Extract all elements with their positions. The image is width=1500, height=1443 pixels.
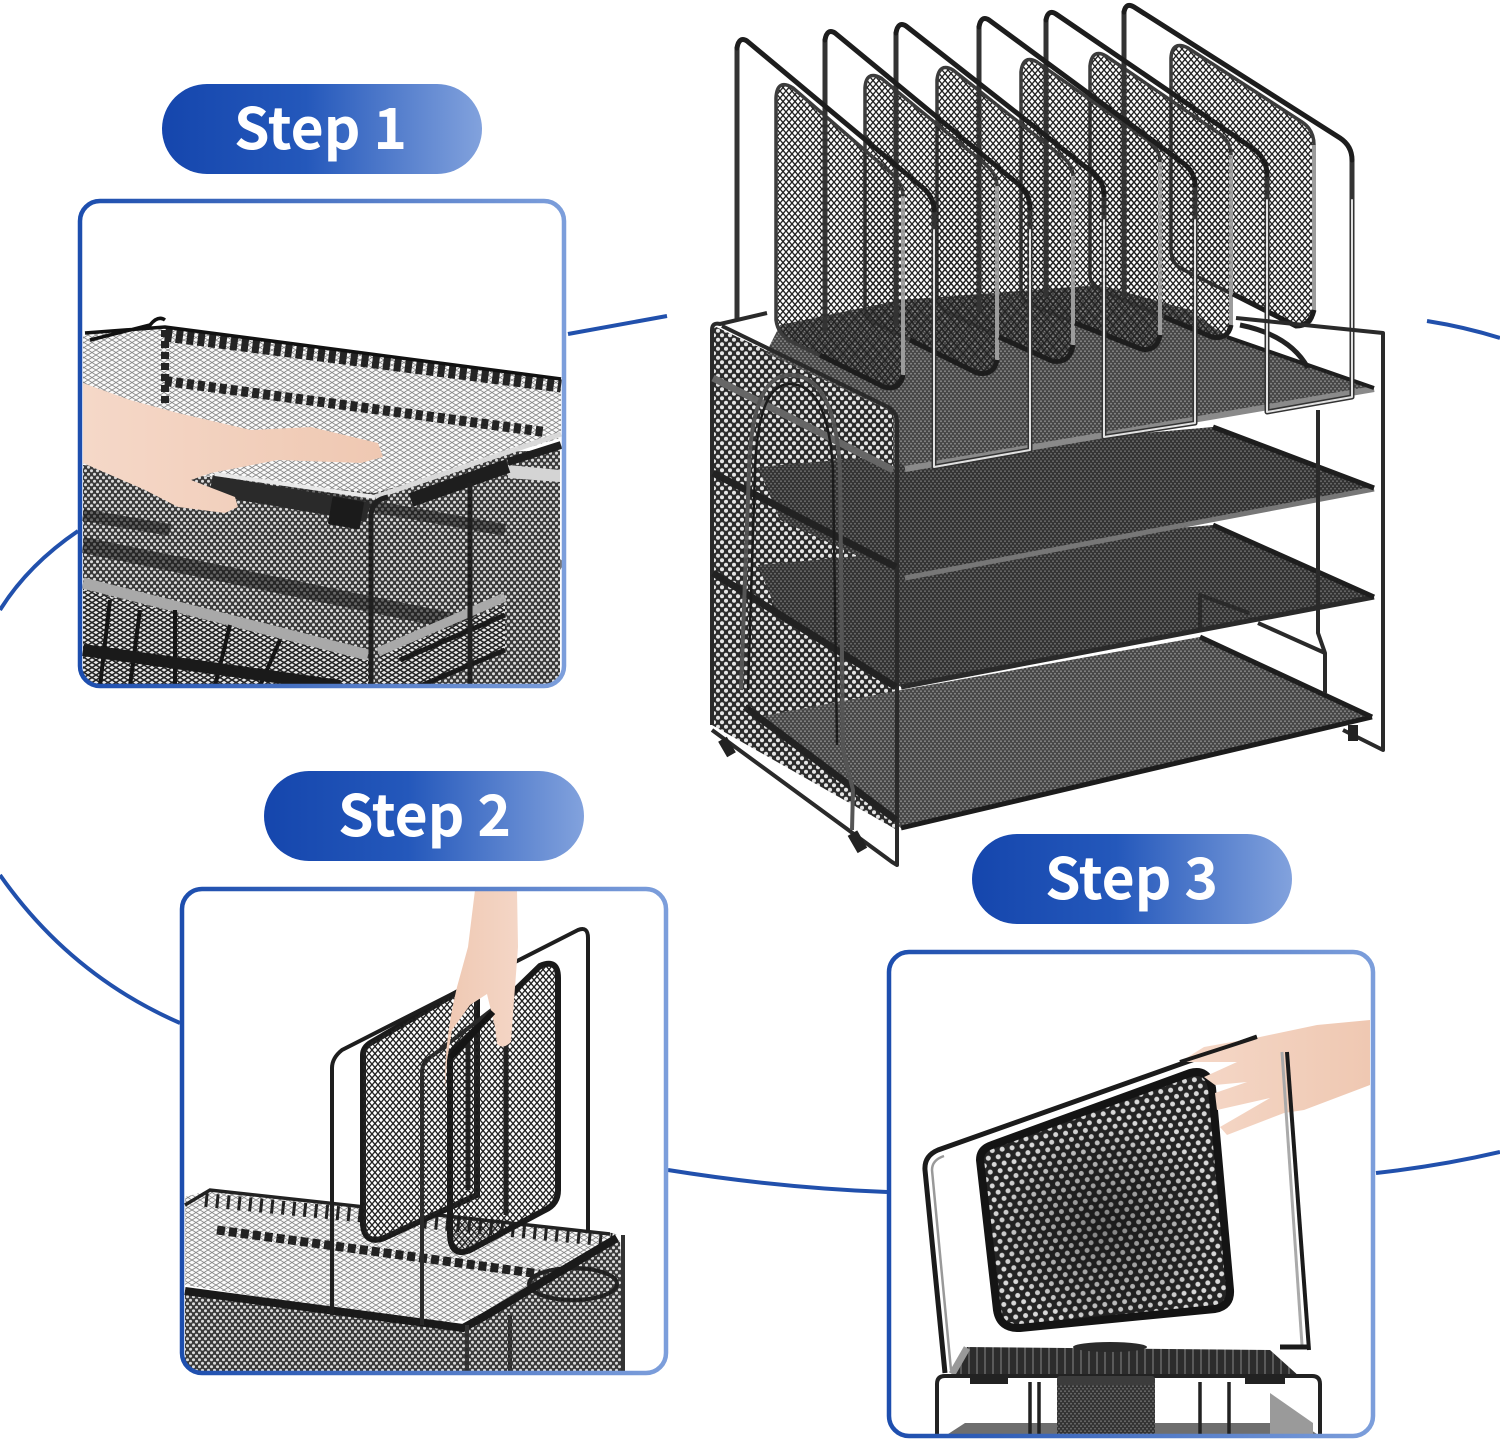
step 1 pill: Step 1 xyxy=(234,84,407,166)
frame verticals and bottoms, dark outline xyxy=(737,12,1352,467)
step 3 pill: Step 3 xyxy=(1045,834,1218,916)
shelf left bevel xyxy=(952,1348,967,1374)
lower wire bars xyxy=(83,583,505,686)
right gray wall xyxy=(1270,1393,1313,1436)
wire frame legs xyxy=(371,483,470,686)
slotted middle strip xyxy=(165,381,545,432)
plate bottom dark edges xyxy=(820,294,1314,388)
side mesh panel xyxy=(712,325,897,830)
clip latch xyxy=(328,496,364,530)
hand xyxy=(83,383,383,513)
wire frame xyxy=(925,1037,1257,1373)
step 2 pill xyxy=(264,771,584,861)
panel border xyxy=(182,889,666,1373)
pen cup xyxy=(527,1266,619,1302)
frame verticals silver core xyxy=(934,200,1352,467)
panel: step 3 photo xyxy=(887,950,1375,1438)
tray back edge xyxy=(185,1190,610,1234)
step 3 pill xyxy=(972,834,1292,924)
tray front edge xyxy=(185,1238,617,1328)
frame sloped tops xyxy=(737,5,1352,210)
dark interior bands xyxy=(83,490,560,632)
bottom tray xyxy=(745,637,1372,828)
hand xyxy=(1180,1020,1370,1135)
step 1 pill xyxy=(162,84,482,174)
shelf top mesh xyxy=(83,327,561,493)
wire frames xyxy=(332,929,623,1373)
step 2 pill: Step 2 xyxy=(338,771,511,853)
second tray xyxy=(758,427,1374,578)
foot clips xyxy=(718,725,1358,853)
base frame xyxy=(937,1376,1320,1436)
third tray xyxy=(758,525,1374,687)
frame right leg xyxy=(1180,1037,1309,1350)
divider plates, back to front xyxy=(776,46,1314,388)
panel: step 1 photo xyxy=(78,199,566,688)
mesh upper side strip xyxy=(716,330,893,470)
right side box xyxy=(508,465,560,578)
lower mesh xyxy=(83,590,368,686)
hand xyxy=(445,890,518,1090)
dark mesh stripes in plate xyxy=(468,1040,506,1215)
back mesh plate texture xyxy=(363,985,477,1240)
slotted vertical strip xyxy=(161,330,169,405)
panel: step 2 photo xyxy=(180,887,668,1375)
tray slotted band xyxy=(217,1230,540,1274)
panel border xyxy=(889,952,1373,1436)
pen cup xyxy=(1057,1342,1155,1436)
lower basket mesh xyxy=(83,450,560,686)
product: desktop mesh organizer xyxy=(712,5,1383,865)
front mesh plate xyxy=(450,964,558,1252)
plate top bar xyxy=(450,1012,493,1058)
tray back wire band xyxy=(205,1200,612,1240)
wire divider frames xyxy=(737,5,1352,467)
shelf xyxy=(952,1347,1296,1374)
slotted back strip xyxy=(165,335,561,386)
panel border xyxy=(80,201,564,686)
top tray xyxy=(760,285,1374,467)
mesh plate xyxy=(980,1072,1230,1328)
plate center shading xyxy=(999,1128,1212,1317)
plate right silver edges xyxy=(903,145,1314,375)
shelf back wire and handle xyxy=(85,318,561,379)
side rails and outer frame xyxy=(712,313,1383,865)
back mesh plate xyxy=(363,985,477,1240)
connector lines xyxy=(0,316,1500,1192)
basket below tray xyxy=(185,1240,625,1373)
shelf front edge xyxy=(211,434,561,512)
tray front edges xyxy=(901,337,1374,828)
lower tray xyxy=(948,1423,1317,1434)
tray mesh xyxy=(185,1190,617,1324)
rear strut behind dividers xyxy=(1240,325,1308,368)
